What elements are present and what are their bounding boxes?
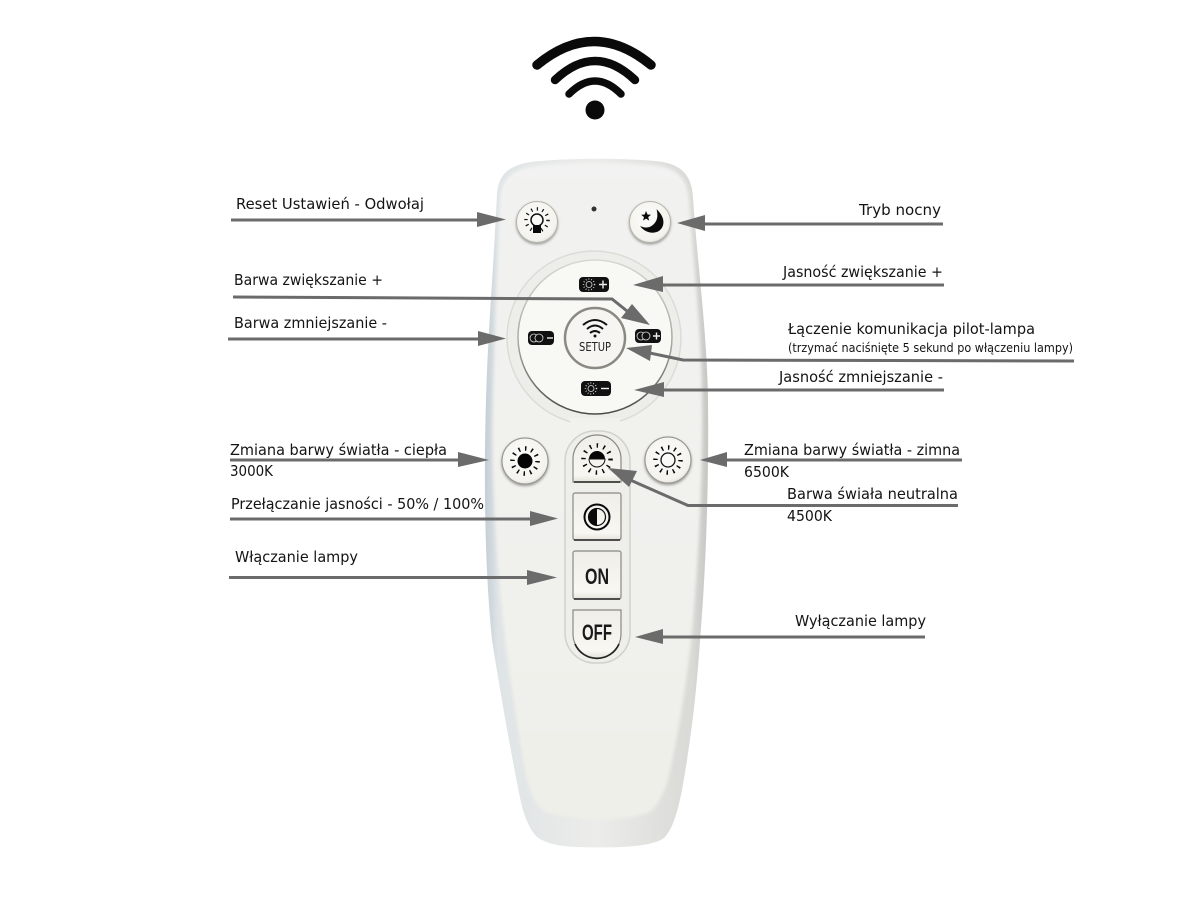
ring recess <box>507 251 681 425</box>
button: brightness toggle <box>573 493 621 540</box>
label: colour down: Barwa zmniejszanie - <box>234 314 387 332</box>
button: off: OFF <box>582 620 612 645</box>
button: cold light <box>645 437 691 483</box>
arrow: warm light <box>230 452 489 467</box>
label: cold light <box>744 441 960 481</box>
remote control <box>485 159 708 847</box>
label: brightness minus <box>581 381 611 396</box>
setup button: SETUP <box>579 340 611 354</box>
channel neck <box>566 418 622 432</box>
arrow: colour down <box>228 331 506 346</box>
arrow: night mode <box>677 215 943 231</box>
label: warm light: Zmiana barwy światła - ciepła <box>230 441 447 459</box>
remote body <box>485 159 708 847</box>
button: on: ON <box>585 564 609 589</box>
label: warm light: 3000K <box>230 462 274 480</box>
front plate <box>493 163 702 819</box>
arrow: colour up <box>233 297 650 325</box>
label: colour up: Barwa zwiększanie + <box>234 271 383 289</box>
arrow: lamp off <box>635 629 925 644</box>
label: reset: Reset Ustawień - Odwołaj <box>236 195 424 213</box>
label: cold light: 6500K <box>744 463 790 481</box>
label: lamp off: Wyłączanie lampy <box>795 612 926 630</box>
indicator dot <box>592 206 596 212</box>
arrow: reset <box>231 212 506 227</box>
arrow: setup <box>626 345 1074 361</box>
label: brightness down: Jasność zmniejszanie - <box>778 368 943 386</box>
label: pairing: Łączenie komunikacja pilot-lampa <box>787 320 1035 338</box>
arrow: lamp on <box>229 570 557 585</box>
icon: wifi signal <box>537 42 651 120</box>
arrow: cold light <box>700 452 962 467</box>
button: reset bulb <box>516 202 558 242</box>
arrow: brightness toggle <box>230 511 558 526</box>
lower button channel <box>565 431 630 663</box>
label: pairing: (trzymać naciśnięte 5 sekund po włączeniu lampy) <box>788 340 1073 355</box>
label: neutral light: Barwa świała neutralna <box>787 485 958 503</box>
button: off <box>573 610 621 658</box>
label: cold light: Zmiana barwy światła - zimna <box>744 441 960 459</box>
setup button <box>565 308 625 368</box>
arrow: brightness down <box>634 382 944 397</box>
label: brightness plus <box>579 277 609 292</box>
label: warm light <box>230 441 447 480</box>
button: on <box>573 551 621 599</box>
button: neutral light <box>573 435 621 482</box>
label: colour plus <box>635 329 661 343</box>
label: brightness up: Jasność zwiększanie + <box>782 263 943 281</box>
arrow: neutral light <box>608 468 958 506</box>
label: colour minus <box>528 331 554 345</box>
label: lamp on: Włączanie lampy <box>235 548 358 566</box>
label: neutral light: 4500K <box>787 507 833 525</box>
button: warm light <box>502 438 548 484</box>
label: neutral light <box>787 485 958 525</box>
label: brightness toggle: Przełączanie jasności - 50% / 100% <box>231 495 484 513</box>
button: night mode <box>630 202 670 242</box>
label: night mode: Tryb nocny <box>858 201 941 219</box>
arrow: brightness up <box>633 276 944 292</box>
direction pad <box>518 260 672 414</box>
label: pairing <box>787 320 1073 355</box>
